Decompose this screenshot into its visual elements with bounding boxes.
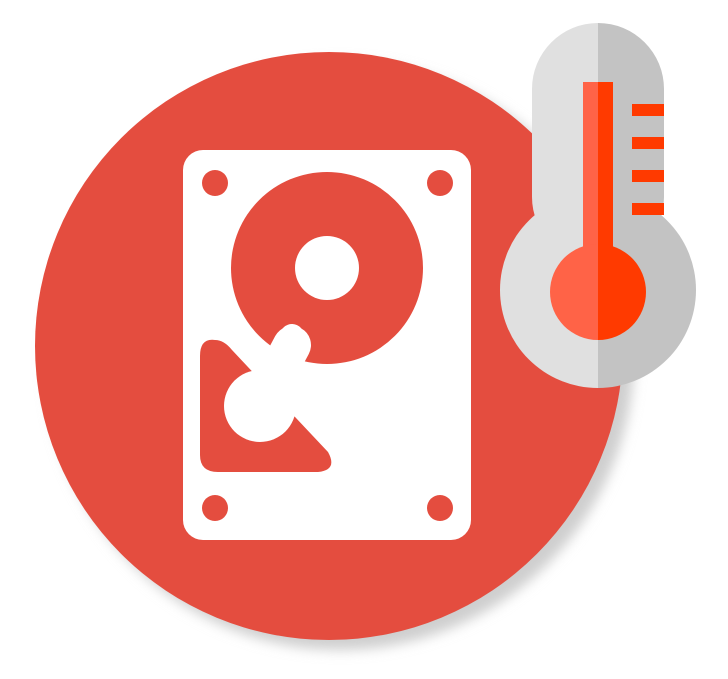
icon: hard drive disc background: [35, 52, 634, 650]
icon: hard drive: [183, 150, 471, 540]
icon: thermometer: [500, 23, 696, 388]
